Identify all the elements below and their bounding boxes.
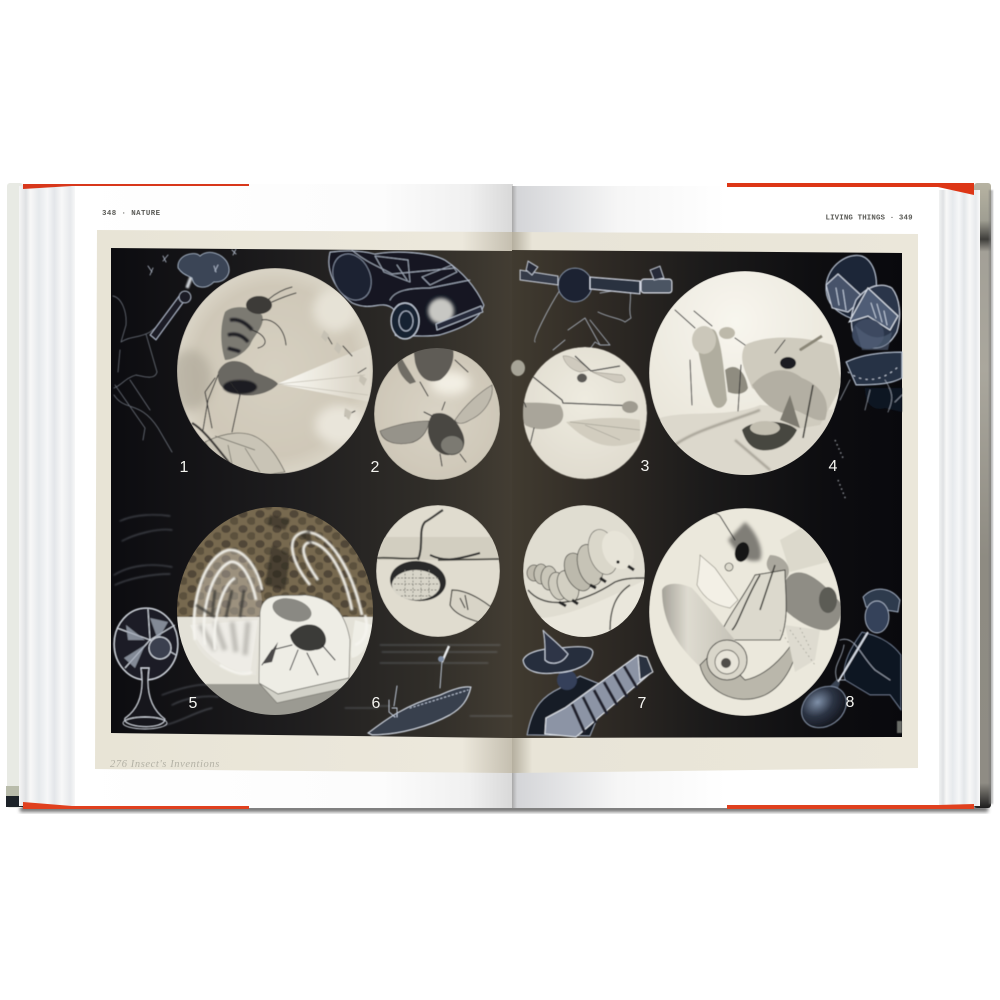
circle 5: bee with honeycomb: [175, 505, 375, 720]
upper beetle: [413, 346, 454, 381]
dragonfly wings: [563, 356, 625, 383]
circle 1: beetle spraying: [168, 268, 373, 480]
dark comb blotches: [265, 515, 312, 590]
red headband bottom left: [23, 802, 249, 809]
cream lower half: [177, 616, 373, 684]
figure numbers: 3: [641, 458, 650, 475]
larva pod: [742, 422, 797, 450]
illustration: glassblower with bulb: [793, 589, 902, 736]
eggs: [785, 625, 820, 672]
leaf: [205, 433, 285, 480]
insect body: [520, 403, 563, 429]
stinger tube: [418, 510, 443, 560]
table band: [205, 684, 340, 715]
figure numbers: 8: [846, 694, 855, 711]
figure numbers: 7: [638, 695, 647, 712]
red headband top right: [727, 183, 974, 195]
illustration: submarine with periscope: [345, 645, 512, 735]
black ground left: [111, 248, 512, 738]
lower beetle: [428, 413, 464, 455]
illustration: accordion player: [523, 630, 653, 737]
finger: [448, 588, 490, 622]
icon: accordion bellows: [545, 655, 652, 737]
red headband bottom right: [727, 804, 974, 809]
figure numbers: 6: [372, 695, 381, 712]
illustration: spray gun figure: [113, 249, 236, 452]
beetle thorax: [221, 307, 263, 360]
right page stack: [938, 190, 980, 806]
left ant: [697, 329, 727, 408]
leaf fold: [697, 555, 738, 608]
beetle wing right: [455, 385, 492, 423]
clear arch block: [259, 595, 350, 694]
rods: [532, 376, 635, 406]
bee: [272, 598, 312, 622]
lower wing streaks: [190, 621, 257, 672]
figure numbers: 4: [829, 458, 838, 475]
red headband top left: [23, 184, 249, 189]
legs and face: [559, 566, 634, 606]
left cover edge: [6, 183, 23, 808]
egg chamber: [388, 559, 448, 603]
abdomen: [782, 572, 841, 630]
leaf curve: [535, 580, 645, 640]
honeycomb half: [175, 505, 375, 617]
mouth parts: [718, 570, 786, 640]
circle 8: insect rolling leaf: [649, 508, 841, 716]
figure numbers: 5: [189, 695, 198, 712]
right page: [512, 186, 939, 808]
hindwing: [566, 418, 640, 446]
beetle abdomen: [218, 361, 278, 396]
icon: insecticide cloud: [178, 252, 229, 287]
beetle head: [246, 296, 272, 314]
page header left: 348 · NATURE: [102, 210, 161, 218]
figure numbers: 2: [371, 459, 380, 476]
flies: [325, 332, 366, 416]
back body: [742, 338, 842, 430]
handwritten caption: 276 Insect's Inventions: [110, 759, 220, 770]
illustration: car: [326, 248, 484, 339]
circle 4: ants: [649, 271, 842, 480]
beetle legs: [203, 320, 286, 432]
page header right: LIVING THINGS · 349: [826, 214, 912, 222]
rolled leaf wrap: [700, 630, 800, 699]
spray jet: [277, 345, 370, 402]
icon: headlight glare: [428, 298, 454, 324]
rolled leaf tube: [662, 584, 735, 672]
left page: [75, 184, 513, 808]
right wing arcs: [290, 530, 368, 624]
sand ground: [660, 405, 840, 480]
illustration: knights: [826, 255, 902, 500]
circle 2: winged beetles: [374, 346, 500, 480]
right ant: [752, 370, 827, 420]
beetle wing left: [380, 421, 429, 444]
black ground right: [512, 250, 902, 738]
caterpillar segments: [527, 565, 541, 581]
left page stack: [19, 186, 76, 806]
eye: [733, 541, 751, 563]
right cover edge: [974, 183, 993, 808]
circle 3: dragonfly and drumstick insect: [511, 347, 647, 479]
book shadow: [20, 806, 988, 812]
circle 6: ovipositor in egg chamber: [376, 505, 500, 637]
figure numbers: [180, 458, 855, 712]
circle 7: caterpillar: [523, 505, 645, 640]
plate paper right: [512, 232, 918, 773]
ground line: [376, 558, 500, 560]
figure numbers: 1: [180, 459, 189, 476]
left wing arcs: [193, 550, 262, 656]
illustration: fan with sound waves: [114, 515, 218, 729]
plate paper left: [95, 230, 512, 773]
illustration: bazooka soldier: [520, 261, 672, 370]
